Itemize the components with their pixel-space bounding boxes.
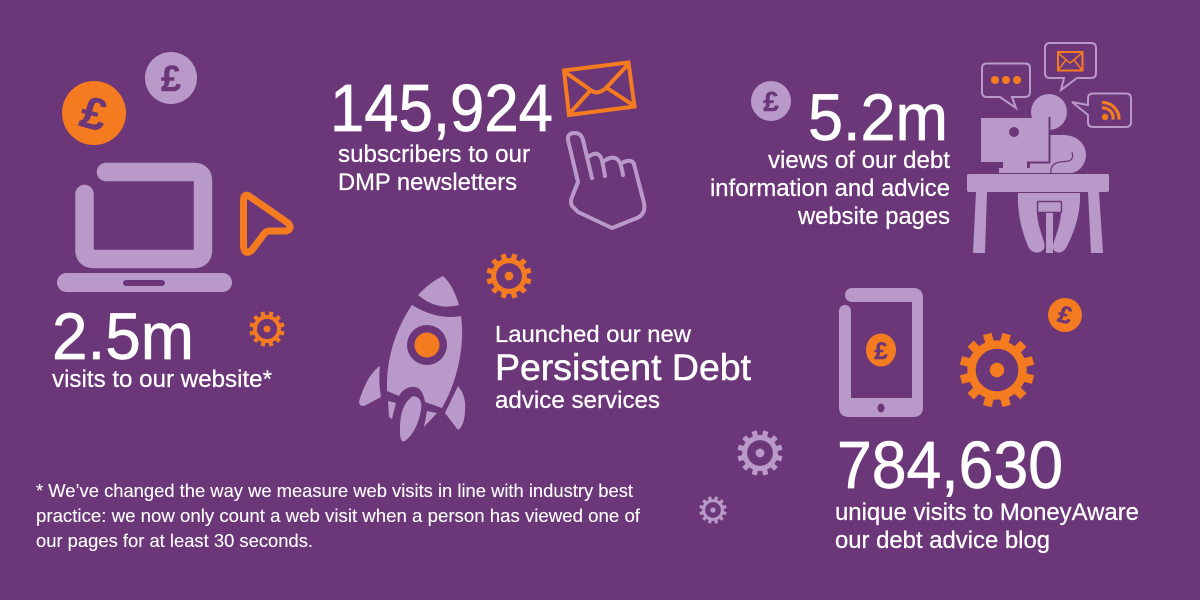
icon: speech bubble with RSS: [1072, 94, 1131, 127]
icon: rocket: [359, 276, 465, 441]
statistic: 2.5m: 2.5m: [52, 299, 194, 373]
icon: lilac pound coin: £: [161, 58, 181, 99]
footnote: [36, 480, 641, 551]
icon: lilac gear: [732, 425, 788, 481]
icon: small lilac gear: [696, 493, 730, 527]
panel: website visits: [52, 52, 290, 393]
icon: lilac pound coin: £: [763, 86, 779, 117]
icon: orange pound coin: £: [75, 86, 113, 141]
panel: persistent debt launch: [359, 248, 752, 441]
icon: person at desk with computer: [967, 94, 1109, 253]
icon: orange gear: [481, 248, 537, 304]
panel: newsletter subscribers: [330, 62, 644, 228]
panel: MoneyAware visits: [696, 288, 1139, 554]
caption: views of our debt information: website pages: [797, 203, 950, 230]
icon: orange pound coin: [1048, 298, 1082, 332]
caption: subscribers: DMP newsletters: [338, 169, 517, 196]
icon: envelope: [564, 62, 634, 115]
icon: laptop: [57, 172, 232, 292]
caption: visits to our website: visits to our website*: [52, 366, 272, 393]
footnote: our pages for at least 30 seconds.: [36, 530, 313, 551]
heading: Persistent Debt: Persistent Debt: [495, 347, 752, 388]
statistic: 5.2m: 5.2m: [808, 80, 948, 154]
icon: lilac pound coin: [751, 81, 791, 121]
caption: views of our debt information: views of our debt: [768, 147, 950, 174]
footnote: * We’ve changed the way we measure web visits in line with industry best: [36, 480, 633, 501]
icon: orange pound coin: £: [1055, 301, 1075, 330]
icon: pointing hand: [568, 133, 644, 228]
caption: unique visits to MoneyAware: our debt advice blog: [835, 527, 1050, 554]
footnote: practice: we now only count a web visit when a person has viewed one of: [36, 505, 641, 526]
caption: unique visits to MoneyAware: unique visits to MoneyAware: [835, 499, 1139, 526]
caption: subscribers: [338, 141, 530, 196]
caption: unique visits to MoneyAware: [835, 499, 1139, 554]
text: launched our new: Launched our new: [495, 321, 692, 347]
icon: tablet with pound coin: [839, 288, 923, 417]
icon: speech bubble with envelope: [1045, 43, 1096, 90]
icon: cursor arrow: [244, 195, 290, 252]
text: advice services: advice services: [495, 387, 660, 414]
caption: views of our debt information: information and advice: [710, 175, 950, 202]
panel: advice page views: [710, 43, 1131, 253]
caption: views of our debt information: [710, 147, 950, 230]
statistic: 145,924: 145,924: [330, 71, 553, 146]
icon: small orange gear: [245, 307, 289, 351]
icon: speech bubble with dots: [982, 64, 1030, 108]
icon: large orange gear: [951, 324, 1043, 416]
icon: tablet with pound coin: £: [874, 338, 888, 365]
icon: lilac pound coin: [145, 52, 197, 104]
caption: subscribers: subscribers to our: [338, 141, 530, 168]
statistic: 784,630: 784,630: [837, 428, 1063, 503]
icon: orange pound coin: [62, 81, 126, 145]
